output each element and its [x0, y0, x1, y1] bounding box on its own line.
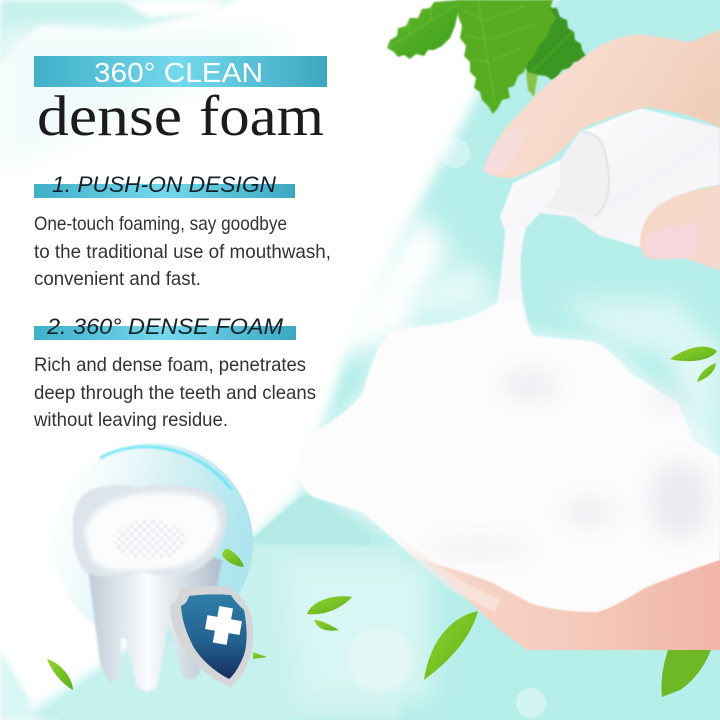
leaf right small: [697, 363, 716, 382]
foam stream: [496, 225, 532, 335]
medical cross: [203, 604, 244, 647]
section 1 heading: 1. PUSH-ON DESIGN: [52, 172, 276, 197]
small leaf centre: [314, 620, 339, 631]
title: [37, 85, 324, 148]
title: dense: [37, 85, 182, 148]
foam shadows: [425, 373, 710, 554]
section 2 text: deep through the teeth and cleans: [34, 382, 316, 404]
section 2 text: Rich and dense foam, penetrates: [34, 354, 306, 376]
bubble highlight arc: [100, 447, 232, 490]
roots: [87, 540, 222, 692]
hand holding the foam: [370, 510, 720, 650]
floating leaves: [47, 347, 717, 697]
thumb nail: [646, 222, 698, 259]
leaf right top: [670, 347, 717, 361]
leaf stem: [526, 72, 538, 97]
section 2 text: [33, 354, 316, 431]
foam mound: [297, 300, 720, 612]
heading banner: [34, 56, 327, 88]
shield: [170, 586, 253, 687]
section 2 text: without leaving residue.: [33, 409, 228, 431]
bottle: [500, 108, 720, 247]
heading banner: 360° CLEAN: [94, 57, 263, 88]
left mint leaf: [387, 0, 459, 59]
right mint leaf: [520, 0, 587, 80]
protective bubble: [53, 443, 253, 643]
crown foam: [85, 492, 219, 571]
leaf near tooth: [222, 549, 244, 567]
section 1 text: [34, 213, 331, 290]
crown shading: [114, 520, 186, 560]
section 1 text: to the traditional use of mouthwash,: [34, 241, 331, 263]
big mint leaves: [387, 0, 587, 114]
upper finger: [483, 30, 720, 178]
leaf under foam: [424, 611, 478, 680]
foam residue on palm: [395, 535, 500, 612]
section 1 text: convenient and fast.: [34, 268, 201, 290]
section 2 heading: 2. 360° DENSE FOAM: [46, 314, 284, 339]
crown base: [73, 485, 227, 577]
thumb: [640, 185, 720, 270]
bottle collar edge: [582, 132, 609, 216]
shield blue face: [181, 594, 247, 679]
title: foam: [199, 85, 324, 148]
leaf bottom right: [661, 650, 711, 697]
tooth illustration: [53, 443, 253, 692]
section 1 text: One-touch foaming, say goodbye: [34, 213, 287, 235]
fingernail: [483, 127, 524, 174]
leaf lower left: [47, 659, 73, 690]
bottle collar: [545, 132, 609, 216]
leaf veins: [388, 0, 572, 105]
centre mint leaf: [458, 0, 556, 114]
leaf centre: [307, 596, 352, 614]
foam halo: [290, 300, 720, 620]
leaf behind shield: [253, 652, 267, 659]
